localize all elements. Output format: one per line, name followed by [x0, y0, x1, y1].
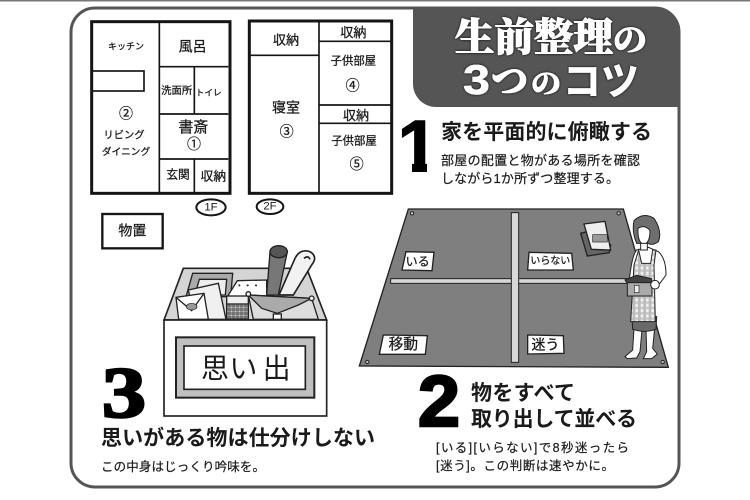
floor plan: 2F: 収納: [343, 108, 369, 123]
tip 3 description: この中身はじっくり吟味を。: [101, 459, 265, 474]
title text: 生前整理: [455, 17, 613, 60]
floor plan: 1F: 洗面所: [161, 84, 192, 97]
title text: コツ: [563, 61, 639, 104]
floor plan: 2F: ③: [280, 124, 294, 140]
legs and feet: [625, 328, 642, 359]
floor plan: 1F: 収納: [201, 170, 226, 184]
face: [638, 227, 650, 245]
tip 1 description: しながら1か所ずつ整理する。: [441, 171, 619, 186]
label: 移動: [379, 335, 427, 354]
tip 1 description: [441, 153, 640, 186]
dark tube: [267, 246, 287, 295]
tape cross: [391, 213, 628, 362]
label: いる: いる: [406, 254, 430, 268]
storage shed: 物置: [118, 223, 146, 239]
title text: 3: [463, 56, 490, 103]
tip 2 heading: [471, 382, 637, 431]
badge: 2F: 2F: [263, 201, 277, 213]
tip 1: [402, 120, 650, 184]
floor plan: 1F: トイレ: [196, 87, 222, 97]
title text: [455, 17, 647, 104]
tip 3 heading: 思いがある物は仕分けしない: [101, 426, 375, 450]
pouch bag: [246, 292, 318, 319]
box label plate: い: [229, 353, 257, 384]
label: いらない: [528, 252, 573, 270]
title text: の: [613, 22, 647, 58]
title text: の: [531, 69, 561, 100]
floor plan: 2F: 収納: [273, 32, 299, 47]
icon: stacked books: [581, 221, 611, 256]
floor plan: 1F: [92, 22, 230, 193]
box label plate: 思: [201, 353, 229, 384]
tip 2 heading: 取り出して並べる: [471, 408, 637, 431]
floor plan: 1F: 書斎: [178, 119, 208, 136]
memories box illustration: [164, 246, 327, 416]
floor plan: 2F: ⑤: [350, 156, 364, 172]
label: 迷う: [528, 335, 564, 354]
skirt: [632, 317, 657, 331]
tip 2: [418, 362, 637, 473]
floor plan: 1F: リビング: [103, 128, 145, 141]
floor plan: 1F: ②: [119, 105, 133, 121]
badge: 1F: 1F: [204, 201, 218, 213]
floor plan: 2F: [249, 21, 392, 193]
outer rounded frame: [71, 8, 679, 487]
storage shed: [102, 214, 163, 248]
label: いる: [402, 252, 434, 271]
box front: [164, 320, 327, 416]
floor plan: 2F: ④: [346, 77, 360, 93]
floor plan: 1F: 風呂: [179, 39, 207, 55]
tip 3: [101, 353, 375, 474]
number 1: 1: [397, 105, 439, 188]
floor plan: 1F: 玄関: [166, 168, 190, 181]
floor plan: 1F: ①: [187, 136, 201, 152]
sorting mat illustration: [359, 209, 668, 367]
box label plate: [176, 337, 314, 398]
tip 2 description: [迷う]。この判断は速やかに。: [436, 459, 614, 473]
badge: 2F: [257, 199, 283, 214]
checked apron: [631, 250, 656, 322]
tip 2 heading: 物をすべて: [471, 382, 575, 405]
carried box: [625, 275, 652, 283]
box interior: [164, 268, 327, 320]
floor plans: [92, 21, 392, 248]
tip 2 description: [いる][いらない]で8秒迷ったら: [436, 441, 629, 455]
floor plan: 1F: ダイニング: [102, 146, 150, 158]
title panel: [413, 7, 680, 107]
number 2: 2: [418, 362, 460, 442]
floor plan: 2F: 子供部屋: [331, 134, 377, 148]
floor plan: 2F: 子供部屋: [331, 54, 376, 68]
woman holding a box: [625, 215, 666, 359]
tip 1 heading: 家を平面的に俯瞰する: [441, 121, 652, 144]
checked cloth: [227, 296, 248, 319]
blouse and arms: [629, 247, 666, 285]
picture frame: [186, 273, 233, 297]
mat: [359, 209, 668, 367]
floor plan: 1F: キッチン: [108, 42, 144, 52]
badge: 1F: [196, 199, 226, 215]
label: 移動: 移動: [389, 336, 418, 353]
letters: [176, 283, 226, 319]
box label plate: 出: [263, 353, 291, 384]
label: 迷う: 迷う: [531, 337, 559, 353]
label: いらない: いらない: [530, 255, 570, 267]
floor plan: 2F: 収納: [340, 25, 366, 40]
tip 1 description: 部屋の配置と物がある場所を確認: [441, 153, 640, 168]
title text: つ: [491, 61, 528, 103]
floor plan: 2F: 寝室: [272, 99, 300, 115]
hair: [633, 215, 660, 244]
card: [227, 280, 267, 297]
number 3: 3: [102, 353, 146, 433]
tip 2 description: [436, 441, 629, 473]
paper roll: [279, 251, 315, 295]
